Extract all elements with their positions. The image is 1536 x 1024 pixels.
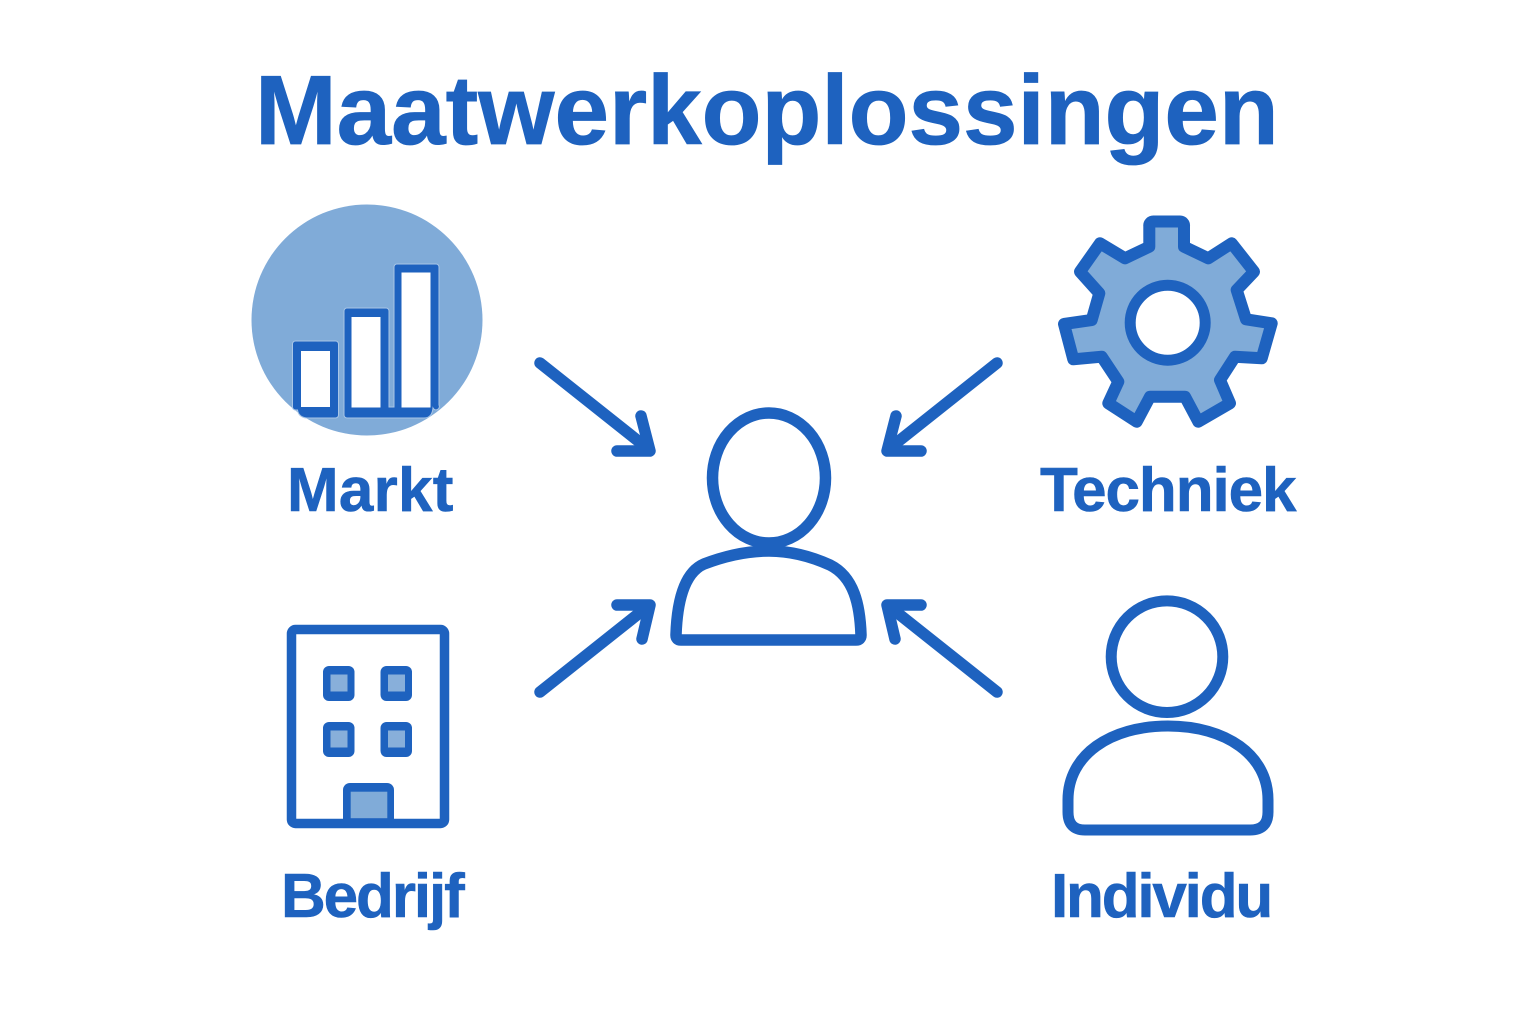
arrow: Markt to person xyxy=(540,363,650,451)
label: Individu: Individu xyxy=(1051,862,1271,931)
arrow: Individu to person xyxy=(887,605,997,692)
icon: central person xyxy=(676,413,861,640)
window xyxy=(323,666,354,701)
icon: individual person xyxy=(1068,601,1268,830)
title: Maatwerkoplossingen xyxy=(255,55,1279,165)
label: Markt: Markt xyxy=(287,456,454,525)
label: Techniek: Techniek xyxy=(1040,456,1297,525)
door xyxy=(343,783,394,825)
arrow: Bedrijf to person xyxy=(540,605,650,692)
icon: market bar chart in circle xyxy=(252,204,482,436)
window xyxy=(380,722,412,757)
icon: building xyxy=(292,630,444,825)
label: Bedrijf: Bedrijf xyxy=(281,862,465,931)
arrow: Techniek to person xyxy=(887,363,997,451)
window xyxy=(380,666,412,701)
window xyxy=(323,722,354,757)
icon: gear xyxy=(1064,221,1272,422)
